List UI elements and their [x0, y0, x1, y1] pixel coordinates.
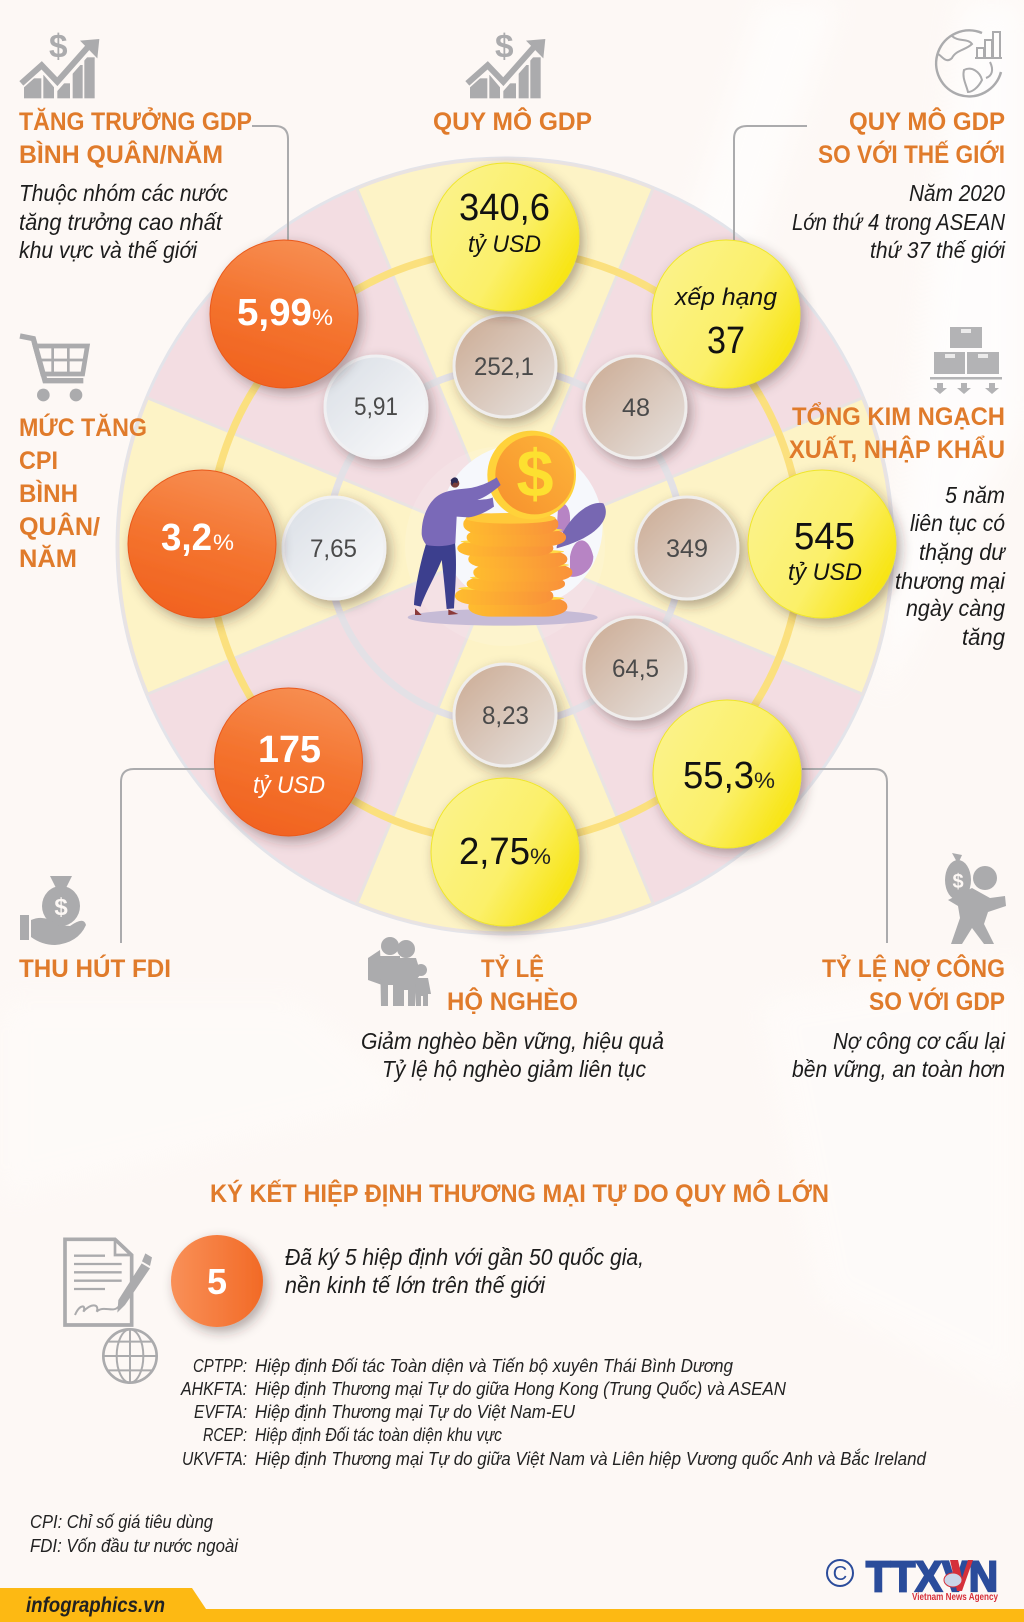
icon: family: [368, 937, 431, 1006]
label: FDI: THU HÚT FDI: [19, 953, 171, 983]
coin stack: [455, 513, 572, 617]
label: public debt: [792, 953, 1006, 1082]
agreement summary: nền kinh tế lớn trên thế giới: [285, 1272, 546, 1298]
agreement list: Hiệp định Đối tác toàn diện khu vực: [255, 1424, 503, 1445]
big circle rank 37: xếp hạng: [674, 284, 778, 311]
label: trade: liên tục có: [910, 510, 1005, 536]
big circle 55,3%: [653, 700, 801, 848]
label: GDP versus world: QUY MÔ GDP: [849, 106, 1005, 136]
icon: debt carrier: $: [952, 871, 964, 893]
agreement list: CPTPP:: [193, 1355, 247, 1376]
small circle 48: [584, 356, 686, 458]
label: trade: XUẤT, NHẬP KHẨU: [789, 434, 1005, 464]
label: GDP versus world: [792, 106, 1006, 263]
big dollar coin: [487, 431, 576, 519]
icon: GDP size chart center: $: [495, 28, 514, 65]
agreement list: Hiệp định Thương mại Tự do Việt Nam-EU: [255, 1401, 576, 1422]
agreement list: UKVFTA:: [182, 1448, 247, 1469]
small circle 48: 48: [622, 394, 650, 422]
big circle 5,99%: %: [312, 305, 333, 330]
label: GDP versus world: SO VỚI THẾ GIỚI: [818, 139, 1005, 169]
connector: GDP world: [734, 126, 807, 240]
small circle 64,5: 64,5: [612, 655, 659, 683]
label: public debt: TỶ LỆ NỢ CÔNG: [822, 953, 1005, 983]
small circle 8,23: [454, 664, 556, 766]
small circle 7,65: [283, 497, 385, 599]
inner gray ring: [327, 368, 683, 724]
icon: shopping cart: [20, 336, 87, 401]
icon: money bag in hand: [20, 876, 86, 945]
label: CPI: [19, 412, 147, 573]
footer band: infographics.vn: [26, 1594, 165, 1617]
agreement list: EVFTA:: [194, 1401, 247, 1422]
label: poverty: Tỷ lệ hộ nghèo giảm liên tục: [382, 1056, 646, 1082]
big circle 55,3%: %: [754, 768, 775, 793]
ground shadow: [408, 609, 598, 626]
big circle 3,2%: [128, 470, 276, 618]
yellow wedge right: [505, 398, 892, 694]
big circle 175: 175: [258, 729, 321, 771]
small circle 8,23: 8,23: [482, 702, 529, 730]
small circle 252,1: [454, 315, 556, 417]
big circle 2,75%: %: [530, 844, 551, 869]
icon: GDP growth chart left: [19, 28, 99, 98]
big circle 5,99%: 5,99: [237, 292, 312, 334]
big circle 545: tỷ USD: [788, 559, 862, 586]
agreement list: AHKFTA:: [180, 1378, 247, 1399]
label: poverty: HỘ NGHÈO: [447, 986, 578, 1016]
big circle 175: tỷ USD: [253, 772, 325, 799]
label: CPI: NĂM: [19, 544, 77, 573]
small circle 5,91: 5,91: [354, 393, 398, 421]
label: public debt: Nợ công cơ cấu lại: [833, 1028, 1006, 1054]
label: trade: 5 năm: [945, 482, 1005, 508]
abbreviations note: CPI: Chỉ số giá tiêu dùng: [30, 1511, 214, 1532]
badge: 5 agreements: 5: [207, 1261, 227, 1302]
icon: debt carrier: [945, 853, 1006, 944]
big circle 545: 545: [794, 516, 855, 558]
big circle 3,2%: 3,2: [161, 517, 212, 559]
connector: public debt: [802, 769, 887, 943]
label: trade: TỔNG KIM NGẠCH: [792, 401, 1005, 431]
icon: boxes export import: [930, 327, 1002, 394]
label: GDP growth: BÌNH QUÂN/NĂM: [19, 139, 223, 169]
small circle 252,1: 252,1: [474, 353, 534, 381]
person: [414, 477, 501, 615]
small circle 349: [636, 497, 738, 599]
heading: free trade agreements: KÝ KẾT HIỆP ĐỊNH THƯƠNG MẠI TỰ DO QUY MÔ LỚN: [210, 1178, 829, 1208]
big dollar coin: $: [516, 438, 554, 512]
icon: contract and globe: [65, 1239, 157, 1383]
label: GDP size: QUY MÔ GDP: [433, 106, 592, 136]
TTXVN logo: TTXVN: [866, 1553, 998, 1601]
central illustration: [408, 431, 606, 626]
yellow wedge top: [357, 159, 653, 546]
label: CPI: QUÂN/: [19, 511, 100, 541]
inner halo: [405, 446, 605, 646]
label: GDP growth: khu vực và thế giới: [19, 237, 198, 263]
TTXVN logo: Vietnam News Agency: [912, 1591, 998, 1603]
label: trade: thặng dư: [919, 539, 1006, 565]
footer band: [0, 1588, 1024, 1622]
outer yellow ring: [209, 250, 801, 842]
label: GDP versus world: thứ 37 thế giới: [870, 237, 1006, 263]
big circle 2,75%: [431, 778, 579, 926]
agreement summary: Đã ký 5 hiệp định với gần 50 quốc gia,: [285, 1244, 644, 1270]
big circle 340,6: 340,6: [459, 187, 550, 229]
yellow wedge bottom: [357, 546, 653, 933]
label: GDP growth: Thuộc nhóm các nước: [19, 180, 228, 206]
agreement list: [180, 1355, 927, 1469]
label: trade: [789, 401, 1006, 650]
agreement list: Hiệp định Đối tác Toàn diện và Tiến bộ xuyên Thái Bình Dương: [255, 1355, 734, 1376]
badge: 5 agreements: [171, 1235, 263, 1327]
connector: FDI: [121, 769, 214, 943]
label: poverty: [361, 953, 664, 1082]
icon: money bag in hand: $: [54, 894, 68, 921]
label: GDP growth: TĂNG TRƯỞNG GDP: [19, 106, 252, 136]
agreement list: Hiệp định Thương mại Tự do giữa Việt Nam và Liên hiệp Vương quốc Anh và Bắc Ireland: [255, 1448, 927, 1469]
label: public debt: bền vững, an toàn hơn: [792, 1056, 1005, 1082]
big circle 545: [748, 470, 896, 618]
big circle 175: [214, 688, 362, 836]
label: GDP growth: tăng trưởng cao nhất: [19, 209, 224, 235]
label: public debt: SO VỚI GDP: [869, 986, 1005, 1016]
leaves: [557, 503, 606, 577]
big circle rank 37: 37: [707, 320, 745, 362]
agreement summary: [285, 1244, 644, 1298]
small circle 5,91: [325, 356, 427, 458]
label: GDP growth: [19, 106, 252, 263]
big circle 5,99%: [210, 240, 358, 388]
white backdrop: [439, 444, 603, 608]
abbreviations note: [30, 1511, 239, 1556]
label: trade: tăng: [962, 624, 1005, 650]
agreement list: RCEP:: [203, 1424, 247, 1445]
small circle 7,65: 7,65: [310, 535, 357, 563]
TTXVN logo: C: [833, 1563, 847, 1585]
label: CPI: CPI: [19, 447, 58, 475]
big circle 2,75%: 2,75: [459, 831, 530, 873]
label: trade: thương mại: [895, 568, 1006, 594]
yellow wedge left: [118, 398, 505, 694]
label: poverty: Giảm nghèo bền vững, hiệu quả: [361, 1028, 664, 1054]
label: trade: ngày càng: [906, 595, 1005, 621]
agreement list: Hiệp định Thương mại Tự do giữa Hong Kong (Trung Quốc) và ASEAN: [255, 1378, 787, 1399]
abbreviations note: FDI: Vốn đầu tư nước ngoài: [30, 1535, 239, 1556]
big circle 340,6: [431, 163, 579, 311]
icon: GDP growth chart left: $: [49, 28, 68, 65]
small circle 349: 349: [666, 535, 708, 563]
big circle 55,3%: 55,3: [683, 755, 754, 797]
label: GDP versus world: Năm 2020: [909, 180, 1005, 206]
label: CPI: BÌNH: [19, 479, 78, 508]
icon: GDP size chart center: [465, 28, 545, 98]
wheel background: [117, 158, 893, 934]
icon: world globe with chart: [936, 30, 1002, 96]
big circle 3,2%: %: [213, 530, 234, 555]
label: CPI: MỨC TĂNG: [19, 412, 147, 442]
big circle 340,6: tỷ USD: [468, 231, 541, 258]
label: poverty: TỶ LỆ: [481, 953, 544, 983]
big circle rank 37: [652, 240, 800, 388]
small circle 64,5: [584, 617, 686, 719]
connector: GDP growth: [252, 126, 288, 240]
